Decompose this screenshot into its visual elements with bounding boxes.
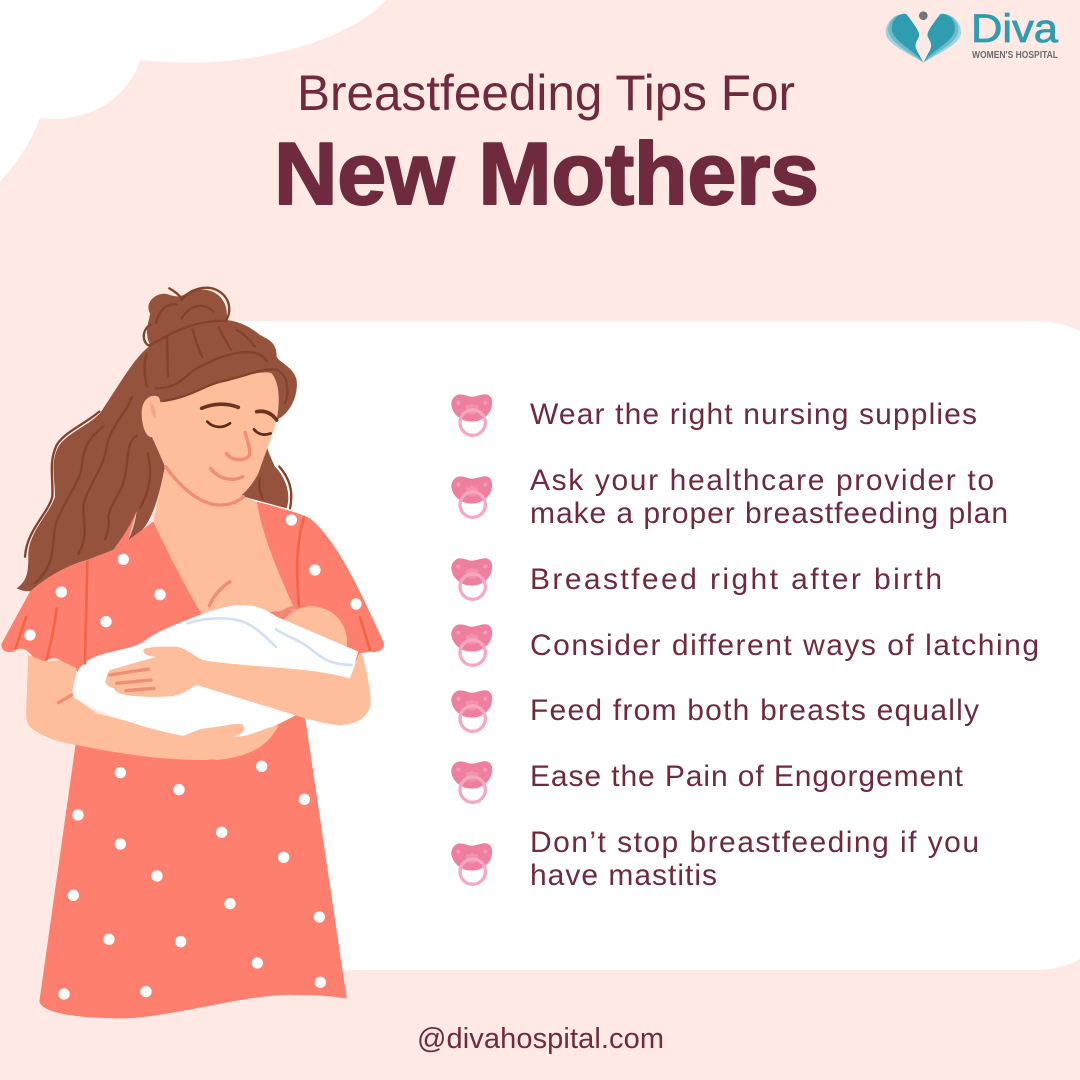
line art: hair strands [25, 288, 291, 583]
tip 2: Ask your healthcare provider to [530, 464, 995, 497]
hair bun [147, 289, 227, 345]
dress fold lines [16, 517, 370, 663]
right arm and hand [105, 647, 371, 725]
dress skirt [39, 703, 347, 1018]
tip 4: Consider different ways of latching [530, 629, 1040, 662]
white content panel [230, 321, 1080, 970]
dress polka dots [24, 514, 362, 1000]
website handle: @divahospital.com [417, 1023, 664, 1055]
ear [142, 396, 160, 437]
icon: pacifier 2 [451, 476, 492, 517]
logo mark [886, 10, 961, 63]
inner ear [151, 402, 156, 419]
tip 7 [530, 826, 980, 892]
cloud shape top left [0, 0, 386, 182]
tip 2 [530, 464, 1009, 530]
hand under baby [167, 724, 278, 760]
icon: pacifier 7 [451, 843, 492, 884]
face [152, 372, 279, 505]
tip 1: Wear the right nursing supplies [530, 398, 978, 431]
logo [886, 7, 1059, 63]
tip 7: have mastitis [530, 859, 718, 892]
icon: pacifier 5 [451, 690, 492, 731]
tip 2: make a proper breastfeeding plan [530, 497, 1009, 530]
icon: pacifier 6 [451, 761, 492, 802]
icon: pacifier 3 [451, 558, 492, 599]
tip 6: Ease the Pain of Engorgement [530, 760, 964, 793]
logo subtitle: WOMEN'S HOSPITAL [972, 50, 1058, 61]
neck and chest [153, 467, 295, 617]
left arm behind baby [26, 655, 278, 760]
line art: eyes and brows [202, 404, 277, 435]
blanket folds [187, 618, 352, 665]
title line 1: Breastfeeding Tips For [297, 65, 795, 121]
icon: pacifier 1 [451, 394, 492, 435]
tip 7: Don’t stop breastfeeding if you [530, 826, 980, 859]
tip 3: Breastfeed right after birth [530, 563, 943, 596]
dress bodice and sleeves [1, 502, 384, 703]
icon: pacifier 4 [451, 624, 492, 665]
title line 2: New Mothers [274, 124, 819, 223]
tip 5: Feed from both breasts equally [530, 694, 980, 727]
blanket [73, 605, 358, 737]
logo wordmark: Diva [971, 7, 1059, 51]
illustration: mother and baby [1, 288, 384, 1018]
line art: skin details [58, 432, 294, 703]
hair [17, 320, 297, 591]
baby head [276, 606, 347, 677]
